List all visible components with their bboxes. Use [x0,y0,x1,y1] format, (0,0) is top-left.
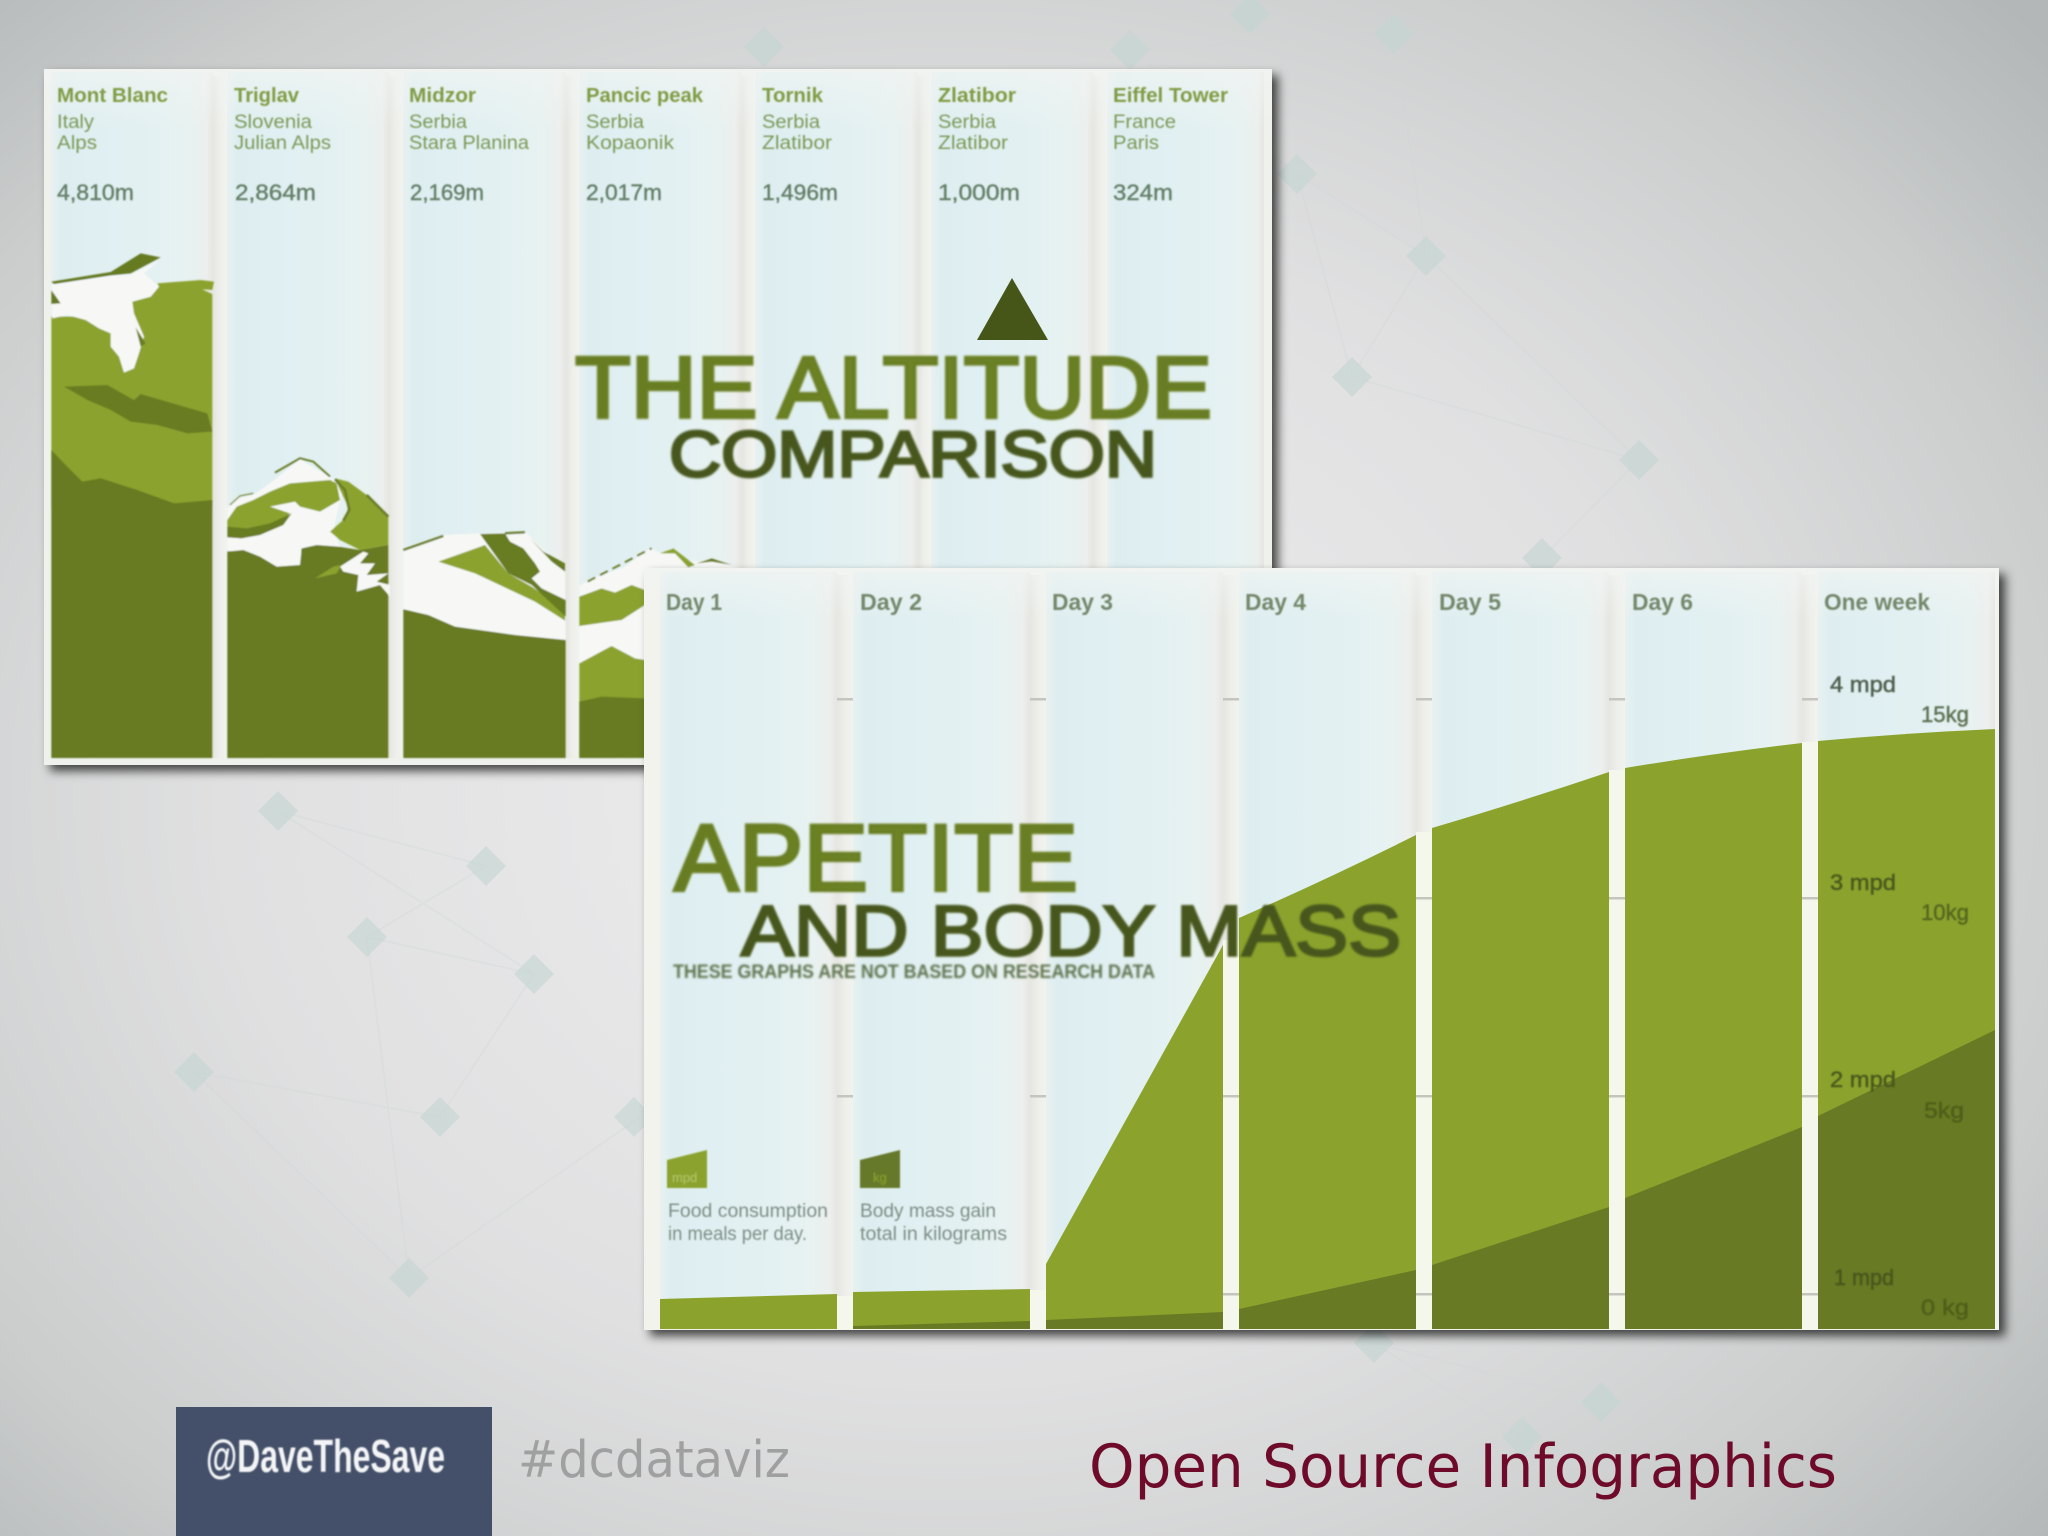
axis labels: mpd [1830,672,1896,1290]
label: Midzor: Serbia [409,112,467,133]
day labels: Day 3 [1052,589,1113,615]
title: apetite and body mass: AND BODY MASS [741,892,1401,972]
day labels: Day 2 [860,589,922,615]
chart: body mass area [853,1030,1995,1329]
label: Zlatibor: 1,000m [938,180,1020,205]
legend: food consumption: Food consumption [668,1201,828,1222]
label: Triglav: Slovenia [234,112,312,133]
axis labels: mpd: 1 mpd [1834,1265,1894,1290]
label: Triglav: Julian Alps [234,133,331,154]
footer: handle box: @DaveTheSave [206,1430,445,1482]
label: Midzor [409,85,529,205]
legend: body mass gain: kg [873,1170,887,1185]
label: Eiffel Tower: 324m [1113,180,1173,205]
label: Pancic peak [586,85,704,205]
day labels: Day 6 [1632,589,1693,615]
legend: body mass gain: Body mass gain [860,1201,996,1222]
day labels: Day 4 [1245,589,1306,615]
mountain: Triglav [227,458,390,758]
label: Pancic peak: Serbia [586,112,644,133]
axis labels: kg: 0 kg [1921,1295,1969,1320]
label: Mont Blanc: 4,810m [57,180,134,205]
mountain: Mont Blanc [51,253,214,758]
label: Eiffel Tower: Paris [1113,133,1159,154]
label: Tornik: Serbia [762,112,820,133]
label: Tornik [762,85,838,205]
label: Midzor: Stara Planina [409,133,529,154]
title: the altitude comparison: COMPARISON [669,418,1157,490]
label: Midzor: Midzor [409,85,476,107]
label: Tornik: Tornik [762,85,824,107]
footer: handle box [176,1407,492,1536]
panel: altitude comparison [44,69,1272,765]
label: Zlatibor: Zlatibor [938,85,1016,107]
legend: food consumption [667,1150,828,1245]
label: Pancic peak: 2,017m [586,180,662,205]
background network [174,0,1659,1457]
mountains [51,253,745,758]
title: apetite and body mass: THESE GRAPHS ARE NOT BASED ON RESEARCH DATA [673,961,1155,983]
legend: food consumption: mpd [672,1170,697,1185]
legend: body mass gain [860,1150,1007,1245]
panel: appetite and body mass [644,568,1999,1330]
label: Zlatibor [938,85,1020,205]
label: Mont Blanc [57,85,168,205]
mountains: Midzor and Pancic peak [403,532,745,758]
icon: triangle peak [977,278,1048,340]
legend: food consumption: in meals per day. [668,1224,807,1245]
label: Zlatibor: Zlatibor [938,133,1009,154]
axis labels: kg [1921,702,1969,1320]
legend: body mass gain: total in kilograms [860,1224,1007,1245]
label: Mont Blanc: Mont Blanc [57,85,168,107]
footer: hashtag: #dcdataviz [518,1431,790,1490]
day labels: One week [1824,589,1930,615]
label: Tornik: 1,496m [762,180,838,205]
label: Pancic peak: Pancic peak [586,85,704,107]
label: Tornik: Zlatibor [762,133,833,154]
axis labels: mpd: 4 mpd [1830,672,1896,697]
label: Triglav: 2,864m [235,180,316,205]
axis labels: kg: 5kg [1924,1098,1964,1123]
label: Mont Blanc: Alps [57,133,97,154]
axis labels: kg: 10kg [1921,900,1969,925]
axis labels: mpd: 2 mpd [1830,1067,1896,1092]
title: the altitude comparison [575,340,1212,490]
axis labels: kg: 15kg [1921,702,1969,727]
label: Triglav: Triglav [234,85,300,107]
label: Eiffel Tower: Eiffel Tower [1113,85,1228,107]
peak labels [57,85,1228,205]
chart: food consumption area [660,729,1995,1329]
label: Zlatibor: Serbia [938,112,996,133]
label: Midzor: 2,169m [410,180,484,205]
title: apetite and body mass: APETITE [674,806,1078,912]
label: Triglav [234,85,331,205]
day labels: Day 5 [1439,589,1501,615]
label: Eiffel Tower [1113,85,1228,205]
label: Eiffel Tower: France [1113,112,1176,133]
footer: section title: Open Source Infographics [1089,1432,1837,1502]
label: Pancic peak: Kopaonik [586,133,675,154]
label: Mont Blanc: Italy [57,112,95,133]
day labels [666,589,1930,615]
title: the altitude comparison: THE ALTITUDE [575,340,1212,436]
axis labels: mpd: 3 mpd [1830,870,1896,895]
title: apetite and body mass [673,806,1401,983]
day labels: Day 1 [666,589,722,615]
